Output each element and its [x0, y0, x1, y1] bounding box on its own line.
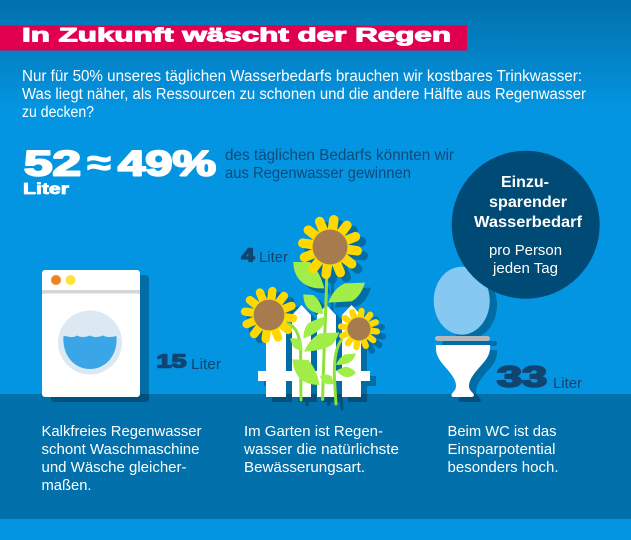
icon: washing machine [42, 270, 140, 397]
intro text: zu decken? [22, 104, 94, 121]
shadows of illustrations [51, 225, 497, 409]
headline statistic: Liter [23, 181, 69, 198]
headline statistic [23, 142, 216, 198]
value: 4 Liter [242, 244, 288, 266]
callout circle: jeden Tag [492, 261, 558, 277]
caption: toilet [448, 423, 558, 476]
callout circle: Wasserbedarf [474, 214, 583, 231]
stems [287, 278, 342, 404]
bowl [436, 345, 490, 397]
intro text: Was liegt näher, als Ressourcen zu schonen und die andere Hälfte aus Regenwasser [22, 86, 586, 103]
value: 33 Liter [497, 362, 582, 394]
value: 4 Liter: 4 [242, 244, 255, 266]
statistic description: des täglichen Bedarfs könnten wir [225, 147, 454, 164]
value: 33 Liter: Liter [553, 376, 582, 392]
title [0, 24, 467, 50]
caption: garden: Bewässerungsart. [244, 459, 365, 476]
caption: garden [243, 423, 399, 476]
caption: washing machine: maßen. [42, 477, 92, 494]
fence [258, 305, 370, 397]
callout circle: sparender [489, 194, 567, 211]
value: 4 Liter: Liter [259, 250, 288, 266]
icon: sunflowers and fence [245, 220, 377, 404]
caption: toilet: besonders hoch. [448, 459, 558, 476]
large sunflower [303, 220, 357, 274]
ground band [0, 394, 631, 519]
statistic description [225, 147, 454, 182]
left sunflower [245, 291, 293, 339]
caption: toilet: Einsparpotential [448, 441, 556, 458]
top gradient [0, 0, 631, 110]
callout circle: Einzu- [501, 174, 549, 191]
caption: toilet: Beim WC ist das [448, 423, 556, 440]
callout circle: pro Person [489, 243, 562, 259]
value: 33 Liter: 33 [497, 362, 547, 394]
headline statistic: 52 [24, 144, 81, 184]
caption: washing machine [42, 423, 202, 494]
headline statistic: 49% [118, 144, 216, 184]
caption: garden: wasser die natürlichste [243, 441, 399, 458]
headline statistic: ≈ [87, 142, 111, 183]
statistic description: aus Regenwasser gewinnen [225, 165, 411, 182]
leaves [290, 262, 365, 385]
icon: toilet [434, 267, 490, 397]
caption: garden: Im Garten ist Regen- [244, 423, 383, 440]
seat [435, 336, 490, 341]
value: 15 Liter: 15 [156, 350, 186, 372]
caption: washing machine: und Wäsche gleicher- [42, 459, 186, 476]
caption: washing machine: schont Waschmaschine [42, 441, 200, 458]
caption: washing machine: Kalkfreies Regenwasser [42, 423, 202, 440]
value: 15 Liter [156, 350, 221, 373]
title: In Zukunft wäscht der Regen [22, 24, 451, 46]
intro text [22, 68, 586, 121]
intro text: Nur für 50% unseres täglichen Wasserbedarfs brauchen wir kostbares Trinkwasser: [22, 68, 582, 85]
callout circle [452, 151, 600, 299]
value: 15 Liter: Liter [191, 357, 221, 373]
lid [434, 267, 490, 335]
right sunflower [341, 311, 377, 347]
